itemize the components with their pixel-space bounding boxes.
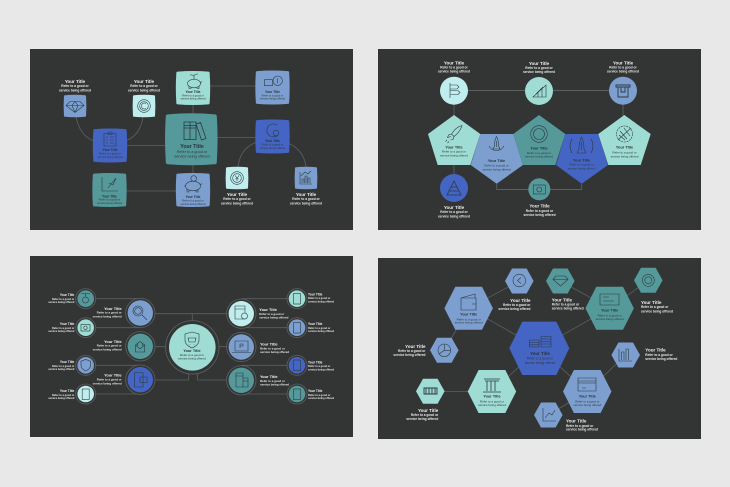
text: central label: service being offered	[178, 357, 206, 361]
node: shop circle	[227, 299, 256, 328]
node: mail circle	[126, 332, 155, 361]
text: small chart caption: service being offered	[645, 357, 677, 361]
text: check label: Refer to a good or	[598, 313, 622, 317]
text: rocket launch label	[568, 158, 596, 170]
text: shop caption: service being offered	[259, 316, 289, 320]
icon: wallet	[461, 294, 476, 310]
text: shop caption: Refer to a good or	[259, 312, 285, 316]
text: triangle chart caption: Refer to a good or	[525, 66, 553, 70]
node: globe pentagon	[598, 115, 651, 165]
text: small pie caption: Your Title	[405, 344, 426, 349]
icon: launch with laurels	[489, 136, 504, 150]
node: small pie hexagon	[430, 338, 459, 363]
icon: devices	[236, 373, 248, 387]
text: small right caption 4	[308, 389, 335, 400]
text: small clock caption	[498, 298, 531, 311]
icon: envelope	[136, 342, 145, 352]
text: globe label: service being offered	[611, 154, 639, 158]
text: atm caption: service being offered	[607, 69, 639, 73]
text: central label	[174, 144, 210, 159]
text: small right caption 1: Refer to a good or	[308, 296, 330, 300]
text: chart caption: service being offered	[290, 201, 322, 205]
text: small right caption 1	[308, 292, 335, 304]
icon: small coin	[642, 274, 654, 286]
text: small right caption 3: service being offered	[308, 368, 335, 372]
text: flag caption	[438, 60, 470, 73]
node: ring pentagon	[513, 115, 565, 165]
text: small left caption 1	[48, 293, 75, 304]
node: atm circle	[609, 77, 637, 105]
node: small right circle 2	[287, 318, 307, 338]
text: ring label: Your Title	[530, 146, 548, 150]
text: coin caption	[128, 79, 160, 92]
text: credit card label: Refer to a good or	[575, 399, 599, 403]
text: top piggy label	[181, 90, 206, 101]
text: cone caption: service being offered	[438, 214, 470, 218]
text: small pie caption	[393, 344, 426, 357]
text: small right caption 4: service being offered	[308, 396, 335, 400]
icon: rocket	[446, 126, 462, 143]
text: small growth caption: Your Title	[566, 419, 587, 424]
text: central hexagon label: service being offered	[525, 361, 555, 365]
text: central label: service being offered	[174, 155, 210, 159]
text: mobile payment caption: Refer to a good or	[97, 377, 123, 381]
text: small right caption 4: Your Title	[308, 389, 323, 393]
text: yen caption: Your Title	[227, 192, 248, 197]
text: rotate label	[260, 139, 285, 150]
text: magnifier caption: Refer to a good or	[97, 311, 123, 315]
text: mobile payment caption: Your Title	[104, 373, 123, 378]
node: rocket pentagon	[428, 115, 480, 165]
text: shop caption	[259, 307, 289, 320]
connectors: radial diagram	[86, 299, 297, 394]
text: small left caption 3: Refer to a good or	[52, 364, 74, 368]
panel: radial circles diagram	[30, 256, 353, 437]
icon: small phone 4	[294, 389, 300, 400]
text: flag caption: Refer to a good or	[440, 65, 468, 69]
icon: pie chart	[438, 344, 451, 357]
text: atm caption: Your Title	[613, 60, 634, 65]
text: bottom piggy label: Your Title	[186, 195, 201, 199]
icon: bank check	[600, 294, 619, 305]
text: diamond caption: Your Title	[65, 79, 86, 84]
text: top piggy label: Refer to a good or	[182, 93, 204, 97]
text: magnifier caption	[93, 306, 123, 319]
node: central shield circle	[166, 321, 219, 374]
text: diamond caption: service being offered	[59, 88, 91, 92]
icon: globe	[616, 126, 632, 142]
node: diamond square	[64, 95, 86, 117]
text: small coin caption: Refer to a good or	[641, 305, 669, 309]
text: diamond caption	[59, 79, 91, 92]
node: magnifier circle	[126, 298, 155, 328]
icon: signpost	[450, 83, 460, 98]
text: yen caption	[221, 192, 253, 205]
text: money label: service being offered	[260, 97, 285, 101]
text: bottom piggy label: Refer to a good or	[182, 199, 204, 203]
text: atm caption: Refer to a good or	[609, 65, 637, 69]
text: growth label: Refer to a good or	[99, 198, 120, 202]
text: central hexagon label: Refer to a good or	[527, 356, 554, 360]
text: small right caption 3: Refer to a good or	[308, 364, 330, 368]
text: small chart caption: Refer to a good or	[645, 353, 674, 357]
icon: piggy bank	[184, 176, 202, 192]
text: small left caption 4: service being offered	[48, 396, 75, 400]
text: small left caption 4: Refer to a good or	[52, 393, 74, 397]
text: devices caption: service being offered	[260, 383, 289, 387]
node: mobile payment circle	[126, 365, 155, 394]
node: camera circle	[528, 178, 550, 200]
node: clipboard square	[93, 128, 127, 162]
node: small right circle 3	[287, 355, 307, 375]
icon: shield with cart	[185, 332, 199, 348]
text: credit card label	[573, 395, 602, 407]
text: wallet label: Your Title	[460, 313, 477, 317]
text: central label: Your Title	[183, 349, 201, 353]
text: small left caption 2: Refer to a good or	[52, 326, 74, 330]
text: small pie caption: service being offered	[393, 353, 426, 357]
text: bank label: service being offered	[478, 403, 506, 407]
icon: camera	[533, 185, 545, 194]
icon: books	[184, 122, 206, 140]
node: triangle chart circle	[525, 77, 553, 105]
text: small right caption 1: service being offered	[308, 300, 335, 304]
icon: small phone	[82, 389, 89, 400]
node: small left circle 3	[76, 355, 96, 375]
text: wallet label: Refer to a good or	[457, 317, 481, 321]
icon: small shield	[81, 360, 90, 371]
text: credit card label: service being offered	[573, 403, 602, 407]
text: shop caption: Your Title	[259, 307, 278, 312]
text: small clock caption: Refer to a good or	[503, 303, 531, 307]
icon: diamond	[66, 102, 84, 112]
text: rocket label: Your Title	[445, 145, 463, 149]
text: small money caption	[406, 408, 439, 421]
node: launch pentagon	[471, 134, 523, 184]
node: cone circle	[440, 174, 468, 202]
icon: clock coin	[513, 274, 526, 287]
text: mobile payment caption	[93, 373, 123, 385]
icon: cone	[447, 181, 461, 195]
icon: cash and coin	[264, 76, 282, 86]
text: check label: Your Title	[601, 309, 618, 313]
icon: laptop	[232, 341, 251, 352]
node: credit card hexagon	[563, 370, 612, 413]
panel: pentagon diagram	[378, 49, 701, 230]
icon: small growth chart	[543, 408, 556, 421]
text: devices caption: Refer to a good or	[260, 379, 286, 383]
node: devices circle	[227, 366, 256, 395]
text: mail caption	[93, 339, 123, 352]
node: small left circle 1	[76, 289, 96, 309]
node: small chart hexagon	[611, 342, 640, 368]
text: small coin caption: Your Title	[641, 300, 662, 305]
text: globe label	[611, 146, 639, 158]
text: small right caption 2: Your Title	[308, 322, 323, 326]
node: small right circle 4	[287, 384, 307, 404]
icon: growth arrow	[102, 177, 118, 191]
node: chart square	[295, 167, 317, 189]
text: clipboard label: Refer to a good or	[99, 152, 121, 156]
text: bank label: Your Title	[483, 395, 501, 399]
icon: ticket machine	[616, 85, 630, 97]
text: small right caption 2	[308, 322, 335, 333]
text: small diamond caption: service being offered	[552, 306, 584, 310]
text: credit card label: Your Title	[579, 395, 596, 399]
icon: bank building	[483, 379, 501, 392]
node: rotate square	[255, 120, 290, 154]
icon: bar chart	[300, 171, 312, 184]
text: small chart caption: Your Title	[645, 348, 666, 353]
text: magnifier caption: service being offered	[93, 315, 122, 319]
text: small money caption: Refer to a good or	[411, 413, 439, 417]
text: small left caption 1: Your Title	[60, 293, 75, 297]
text: small left caption 4	[48, 389, 75, 400]
node: laptop circle	[227, 332, 256, 362]
text: small right caption 3	[308, 360, 335, 372]
text: mail caption: Your Title	[104, 339, 123, 344]
text: rocket launch label: service being offered	[568, 166, 596, 170]
icon: small phone 3	[294, 360, 300, 370]
text: rotate label: service being offered	[260, 146, 285, 150]
text: wallet label: service being offered	[455, 321, 483, 325]
text: small right caption 1: Your Title	[308, 292, 323, 296]
icon: hanging coin	[81, 294, 90, 303]
text: money label: Your Title	[265, 90, 280, 94]
text: ring label	[525, 146, 553, 159]
text: triangle chart caption: Your Title	[529, 61, 550, 66]
text: small coin caption	[641, 300, 673, 313]
text: devices caption: Your Title	[260, 374, 278, 379]
node: money square	[255, 70, 290, 104]
node: small left circle 2	[76, 318, 96, 338]
icon: small phone 1	[294, 294, 300, 304]
text: rocket label	[440, 145, 468, 158]
text: money label: Refer to a good or	[262, 93, 283, 97]
text: growth label: service being offered	[97, 201, 122, 205]
text: growth label	[97, 194, 122, 205]
node: small diamond hexagon	[546, 268, 575, 294]
text: yen caption: service being offered	[221, 201, 253, 205]
text: clipboard label	[98, 148, 123, 159]
text: small left caption 3: service being offered	[48, 367, 75, 371]
icon: small diamond	[553, 276, 568, 286]
text: laptop caption	[260, 341, 289, 354]
node: yen square	[226, 167, 248, 189]
node: central coins hexagon	[509, 322, 569, 375]
text: globe label: Refer to a good or	[612, 150, 637, 154]
text: cone caption	[438, 205, 470, 218]
text: small right caption 2: Refer to a good or	[308, 326, 330, 330]
text: small right caption 3: Your Title	[308, 360, 323, 364]
text: cone caption: Your Title	[444, 205, 465, 210]
text: small left caption 1: Refer to a good or	[52, 297, 74, 301]
text: clipboard label: Your Title	[103, 148, 118, 152]
text: flag caption: Your Title	[444, 60, 465, 65]
node: rocket chart square	[92, 173, 127, 207]
text: small left caption 3	[48, 360, 75, 371]
text: central hexagon label	[525, 351, 555, 365]
text: laptop caption: service being offered	[260, 350, 289, 354]
text: small right caption 4: Refer to a good or	[308, 393, 330, 397]
text: small clock caption: service being offered	[498, 307, 531, 311]
node: small money hexagon	[416, 379, 445, 404]
text: clipboard label: service being offered	[98, 155, 123, 159]
text: small growth caption	[566, 419, 598, 432]
text: camera caption: service being offered	[523, 213, 556, 217]
icon: piggy with plant	[188, 74, 202, 88]
text: central label: Your Title	[180, 144, 204, 150]
node: bank hexagon	[468, 370, 516, 413]
text: diamond caption: Refer to a good or	[61, 84, 89, 88]
text: bank label	[478, 395, 506, 407]
text: cone caption: Refer to a good or	[440, 210, 468, 214]
text: mobile payment caption: service being offered	[93, 381, 122, 385]
icon: small bar chart	[619, 349, 632, 361]
node: small coin hexagon	[634, 268, 663, 293]
node: central books square	[165, 113, 218, 165]
text: mail caption: service being offered	[93, 348, 122, 352]
text: magnifier caption: Your Title	[104, 306, 123, 311]
node: check hexagon	[585, 287, 634, 330]
panel: rounded square flow diagram	[30, 49, 353, 230]
text: rotate label: Your Title	[265, 139, 280, 143]
text: wallet label	[455, 313, 483, 325]
node: rocket launch pentagon	[556, 134, 608, 184]
text: small money caption: Your Title	[418, 408, 439, 413]
node: top piggy square	[176, 71, 210, 105]
text: central label: Refer to a good or	[177, 150, 208, 154]
node: small growth hexagon	[534, 402, 563, 428]
text: small diamond caption: Refer to a good or	[552, 302, 580, 306]
text: small pie caption: Refer to a good or	[398, 349, 426, 353]
text: rocket launch label: Your Title	[573, 158, 590, 162]
icon: coin roll	[424, 388, 437, 394]
icon: rotating coin	[267, 124, 279, 137]
node: flag circle	[440, 77, 468, 105]
text: small right caption 2: service being offered	[308, 329, 335, 333]
connectors: pentagon diagram	[454, 90, 623, 190]
icon: yen coin	[231, 172, 243, 184]
text: ring label: Refer to a good or	[527, 151, 551, 155]
text: bottom piggy label	[181, 195, 206, 206]
node: wallet hexagon	[444, 287, 493, 330]
text: top piggy label: service being offered	[181, 97, 206, 101]
icon: circular arrows	[531, 126, 547, 142]
text: globe label: Your Title	[616, 146, 633, 150]
text: money label	[260, 90, 285, 101]
connectors: hexagon network	[430, 280, 648, 415]
text: check label: service being offered	[596, 317, 624, 321]
icon: small camera	[81, 324, 90, 331]
icon: magnifier	[133, 306, 147, 320]
text: small diamond caption: Your Title	[552, 298, 573, 303]
text: growth label: Your Title	[102, 194, 117, 198]
icon: credit card	[578, 378, 596, 391]
panel: hexagon network diagram	[378, 258, 701, 439]
text: mail caption: Refer to a good or	[97, 344, 123, 348]
icon: shop and clock	[235, 306, 248, 319]
text: launch label: service being offered	[483, 167, 511, 171]
text: triangle chart caption: service being offered	[523, 70, 555, 74]
text: chart caption: Your Title	[296, 192, 317, 197]
text: bottom piggy label: service being offered	[181, 202, 206, 206]
icon: rising chart	[533, 85, 546, 97]
text: small left caption 2: service being offered	[48, 329, 75, 333]
node: bottom piggy square	[176, 173, 210, 207]
text: central label: Refer to a good or	[180, 353, 204, 357]
text: central hexagon label: Your Title	[530, 351, 550, 356]
text: top piggy label: Your Title	[186, 90, 201, 94]
text: small chart caption	[645, 348, 677, 361]
text: launch label: Your Title	[488, 159, 505, 163]
text: central label	[178, 349, 206, 361]
icon: small phone 2	[294, 322, 300, 333]
text: small money caption: service being offered	[406, 417, 438, 421]
icon: coin	[138, 100, 150, 112]
text: rocket label: service being offered	[440, 154, 468, 158]
text: devices caption	[260, 374, 289, 387]
text: camera caption: Your Title	[529, 204, 550, 209]
text: camera caption	[523, 204, 556, 217]
text: small left caption 2: Your Title	[60, 322, 75, 326]
icon: clipboard	[104, 132, 116, 146]
text: launch label: Refer to a good or	[484, 164, 509, 168]
node: coin square	[133, 95, 155, 117]
text: triangle chart caption	[523, 61, 555, 74]
text: small left caption 3: Your Title	[60, 360, 75, 364]
text: ring label: service being offered	[525, 155, 553, 159]
connectors: square diagram	[76, 86, 306, 191]
node: small right circle 1	[287, 289, 307, 309]
text: laptop caption: Refer to a good or	[260, 346, 286, 350]
icon: coin stacks	[530, 336, 551, 347]
text: coin caption: Refer to a good or	[130, 84, 158, 88]
icon: mobile with card	[134, 372, 147, 387]
text: small growth caption: Refer to a good or	[566, 424, 594, 428]
node: small clock hexagon	[505, 268, 534, 294]
text: flag caption: service being offered	[438, 69, 470, 73]
text: chart caption	[290, 192, 322, 205]
text: camera caption: Refer to a good or	[526, 209, 554, 213]
text: launch label	[483, 159, 511, 171]
text: yen caption: Refer to a good or	[223, 197, 251, 201]
text: bank label: Refer to a good or	[480, 399, 504, 403]
text: atm caption	[607, 60, 639, 73]
text: small left caption 2	[48, 322, 75, 333]
text: rocket launch label: Refer to a good or	[569, 163, 594, 167]
text: small clock caption: Your Title	[510, 298, 531, 303]
text: coin caption: service being offered	[128, 88, 160, 92]
text: rocket label: Refer to a good or	[442, 150, 466, 154]
text: chart caption: Refer to a good or	[292, 197, 320, 201]
text: small growth caption: service being offered	[566, 428, 598, 432]
node: small left circle 4	[76, 384, 96, 404]
text: small left caption 4: Your Title	[60, 389, 75, 393]
text: small left caption 1: service being offered	[48, 300, 75, 304]
text: laptop caption: Your Title	[260, 341, 278, 346]
text: small diamond caption	[552, 298, 584, 310]
icon: rocket with brackets	[570, 137, 593, 153]
text: check label	[596, 309, 624, 321]
text: coin caption: Your Title	[134, 79, 155, 84]
text: rotate label: Refer to a good or	[262, 143, 283, 147]
text: small coin caption: service being offered	[641, 309, 673, 313]
